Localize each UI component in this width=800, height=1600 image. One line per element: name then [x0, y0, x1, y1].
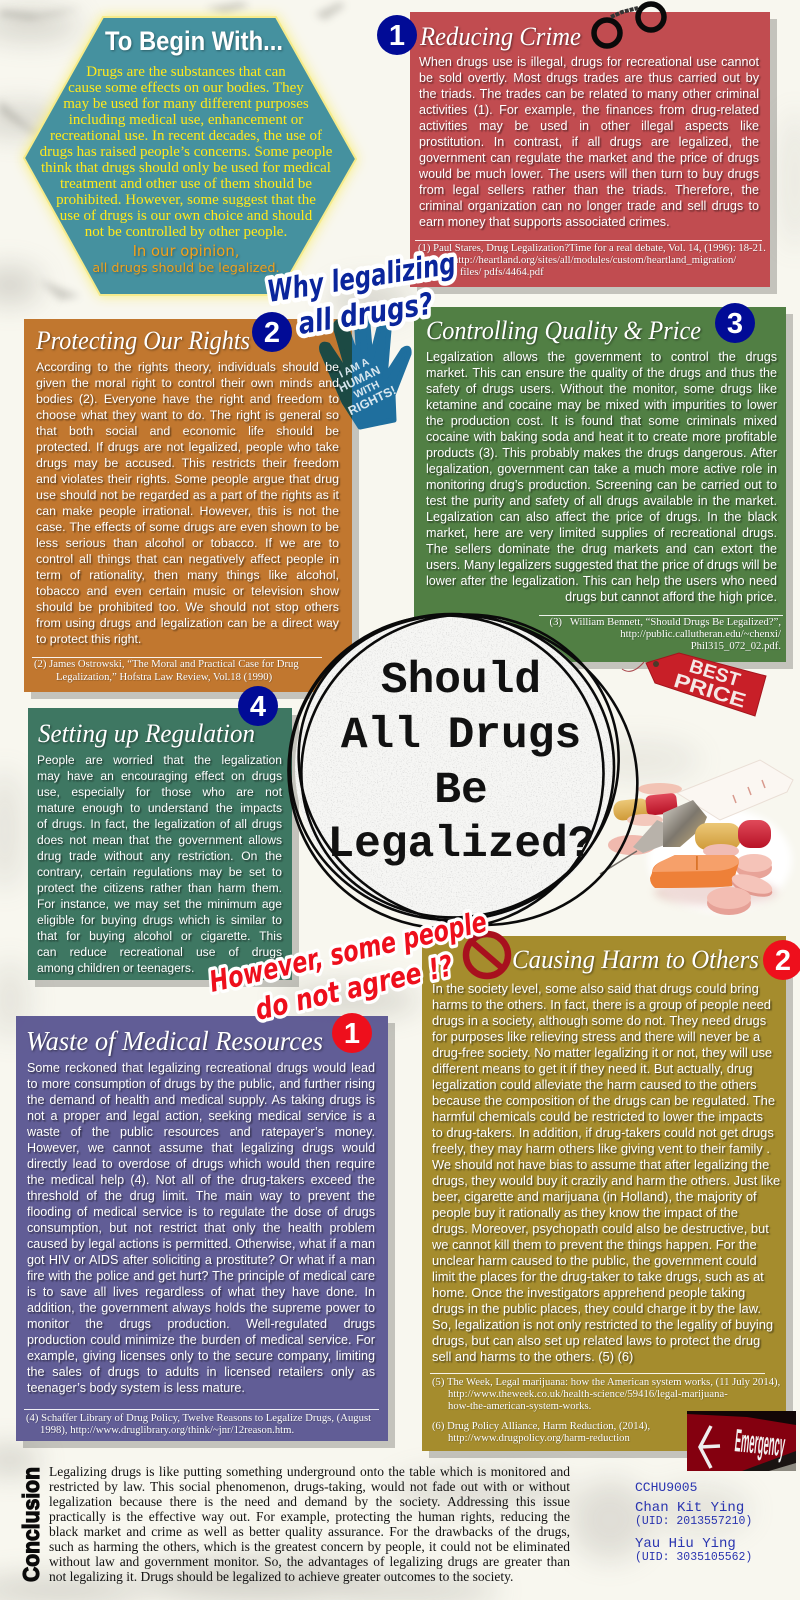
references 5 and 6: (6) Drug Policy Alliance, Harm Reduction, (2014),	[432, 1420, 650, 1432]
panel: waste of medical resources	[16, 1016, 388, 1441]
tag: best price	[622, 652, 767, 717]
body text: sell and harms to the others. (5) (6)	[432, 1349, 633, 1364]
body text: test the purity and safety of all drugs available in the market.	[426, 494, 777, 508]
title text	[327, 656, 595, 870]
body text: ketamine and cocaine may be mixed with impurities to lower	[426, 398, 777, 412]
body text: caused by legal actions is permitted. Otherwise, what if a man	[27, 1237, 375, 1251]
body text: the triads. The trades can be related to many other criminal	[419, 87, 759, 101]
body text: activities (1). For example, the finances from drug-related	[419, 103, 759, 117]
body text: protect the citizens rather than harm them.	[37, 881, 282, 895]
body text: freely, they may harm others like giving vent to their family .	[432, 1141, 770, 1156]
body text: example, giving licenses only to the secure company, limiting	[27, 1349, 375, 1363]
body text: drugs in the public places, they could charge it by the law.	[432, 1301, 761, 1316]
badge: blue 2: 2	[264, 317, 280, 349]
heading: reducing crime: Reducing Crime	[419, 22, 581, 51]
text: conclusion: not legalizing it. Drugs should be legalized to achieve greater outcomes to the society.	[49, 1569, 513, 1584]
panel: to begin with (hexagon)	[16, 8, 364, 304]
reference 3: (3) William Bennett, “Should Drugs Be Legalized?”,	[550, 616, 781, 628]
references 5 and 6: http://www.theweek.co.uk/health-science/59416/legal-marijuana-	[448, 1388, 728, 1400]
body text: to drug-takers. In addition, if drug-takers could not get drugs	[432, 1125, 774, 1140]
body text: limit the places for the drug-taker to take drugs, such as at	[432, 1269, 764, 1284]
intro text: cause some effects on our bodies. They	[68, 80, 304, 96]
reference 4: (4) Schaffer Library of Drug Policy, Twelve Reasons to Legalize Drugs, (August	[26, 1412, 371, 1424]
reference 1: files/ pdfs/4464.pdf	[460, 266, 544, 278]
reference 4: 1998), http://www.druglibrary.org/think/~jnr/12reason.htm.	[40, 1424, 294, 1436]
body text: the medical help (4). Not all of the drug-takers exceed the	[27, 1173, 375, 1187]
body text: drug-free society. No matter legalizing it or not, they will use	[432, 1045, 772, 1060]
body text: We should not have bias to assume that after legalizing the	[432, 1157, 769, 1172]
body text: earn money that supports associated crimes.	[419, 215, 670, 229]
icon: human rights hand	[319, 316, 412, 430]
text: conclusion: Legalizing drugs is like putting something underground onto the table which is monitored and	[49, 1464, 570, 1479]
icon: prohibition sign	[462, 930, 512, 980]
body text: threshold of the drug limit. The main way to prevent the	[27, 1189, 375, 1203]
body text: harmful chemicals could be restricted to lower the impacts	[432, 1109, 763, 1124]
body text	[432, 981, 782, 1366]
body text: the sales of drugs to adults in licensed retailers only as	[27, 1365, 375, 1379]
body text: flooding of medical service is to regulate the dose of drugs	[27, 1205, 375, 1219]
body text: cocaine with baking soda and heat it to create more profitable	[426, 430, 777, 444]
body text: protected. If drugs are not legalized, people who take	[36, 440, 339, 454]
hexagon shape	[16, 8, 364, 304]
icon: handcuffs	[591, 1, 667, 49]
body text: drugs may be accused. This restricts their freedom	[36, 456, 339, 470]
intro text: drugs has raised people’s concerns. Some people	[40, 144, 332, 160]
body text: that both social and economic life should be	[36, 424, 339, 438]
opinion statement: all drugs should be legalized.	[92, 261, 280, 276]
reference 3	[539, 615, 783, 652]
panel: controlling quality and price	[414, 307, 786, 662]
body text: addition, the government always holds the supreme power to	[27, 1301, 375, 1315]
opinion statement: In our opinion,	[133, 243, 239, 260]
intro text: Drugs are the substances that can	[86, 64, 286, 80]
heading: protecting our rights: Protecting Our Rights	[35, 326, 250, 355]
body text: can reduce recreational use of drugs	[37, 945, 282, 959]
body text: from legal sellers rather than the triads. Therefore, the	[419, 183, 759, 197]
body text	[36, 360, 771, 1024]
body text: consumption, but not restrict that only the health problem	[27, 1221, 375, 1235]
body text: bodies (2). Everyone have the right and freedom to	[36, 392, 339, 406]
text: conclusion: legalization because there is the need and demand by the society. Addressing this issue	[49, 1494, 570, 1509]
banner: however some people do not agree: However, some people	[206, 904, 490, 999]
intro text: may be used for many different purposes	[63, 96, 309, 112]
intro text: recreational use. In recent decades, the use of	[50, 128, 322, 144]
body text: be sold overtly. Most drugs trades are thus carried out by	[419, 71, 759, 85]
body text: However, we cannot assume that legalizing drugs would	[27, 1141, 375, 1155]
banner: why legalizing all drugs: all drugs?	[296, 287, 436, 342]
text: conclusion: black market and crime as well as better quality assurance. For the drawbacks of the drugs,	[49, 1524, 570, 1539]
body text: Legalization allows the government to control the drugs	[426, 350, 777, 364]
badge: blue 4: 4	[250, 691, 266, 723]
reference 2: (2) James Ostrowski, “The Moral and Practical Case for Drug	[34, 658, 299, 670]
body text: contrary, certain regulations may be set to	[37, 865, 282, 879]
reference 4	[24, 1409, 379, 1436]
references 5 and 6: how-the-american-system-works.	[448, 1400, 591, 1412]
banner: however some people do not agree	[206, 904, 490, 1027]
references 5 and 6	[430, 1373, 780, 1444]
body text: According to the rights theory, individuals should be	[36, 360, 339, 374]
body text: not a proper and legal action, seeking medical service is a	[27, 1109, 375, 1123]
panel: reducing crime	[410, 12, 770, 287]
badge: red 1: 1	[344, 1018, 360, 1050]
body text: less serious than alcohol or tobacco. If we are to	[36, 536, 339, 550]
reference 1: http://heartland.org/sites/all/modules/custom/heartland_migration/	[453, 254, 736, 266]
title text: Should	[381, 656, 541, 706]
icon: human rights hand: HUMAN	[336, 363, 383, 395]
body text: got HIV or AIDS after soliciting a prostitute? Or what if a man	[27, 1253, 375, 1267]
badge: red 2: 2	[775, 945, 791, 977]
heading: conclusion vertical: Conclusion	[18, 1467, 44, 1582]
body text: unclear harm caused to the public, the government could	[432, 1253, 757, 1268]
intro text: including medical use, enhancement or	[69, 112, 303, 128]
body text: legalization, government can take a much more active role in	[426, 462, 777, 476]
references 5 and 6: http://www.drugpolicy.org/harm-reduction	[448, 1432, 630, 1444]
reference 1: (1) Paul Stares, Drug Legalization?Time for a real debate, Vol. 14, (1996): 18-21.	[418, 242, 766, 254]
credits: (UID: 3035105562)	[635, 1551, 752, 1564]
body text: use should not be regarded as a part of the rights as it	[36, 488, 339, 502]
title text: All Drugs	[341, 711, 581, 761]
body text: monitor the drugs production. Well-regulated drugs	[27, 1317, 375, 1331]
intro text: prohibited. However, some suggest that the	[56, 192, 316, 208]
heading: setting up regulation: Setting up Regulation	[38, 719, 255, 748]
body text: from using drugs and legalization can be a direct way	[36, 616, 339, 630]
body text: For instance, we may set the minimum age	[37, 897, 282, 911]
badge: blue 1	[254, 15, 755, 324]
body text: would be much lower. The users will then turn to buy drugs	[419, 167, 759, 181]
body text: safety of drugs users. Without the monitor, some drugs like	[426, 382, 777, 396]
tag: best price: BEST	[687, 656, 743, 691]
references 5 and 6: (5) The Week, Legal marijuana: how the American system works, (11 July 2014),	[432, 1376, 780, 1388]
body text: users. Many legalizers suggested that the price of drugs will be	[426, 558, 777, 572]
body text: So, legalization is not only restricted to the legality of buying	[432, 1317, 773, 1332]
tag: best price: PRICE	[671, 670, 748, 713]
body text: drugs, they would buy it crazily and harm the others. Just like	[432, 1173, 780, 1188]
body text: directly lead to overdose of drugs which would then require	[27, 1157, 375, 1171]
body text: that for buying alcohol or cigarette. This	[37, 929, 282, 943]
body text: drugs. Moreover, psychopath could also be destructive, but	[432, 1221, 769, 1236]
title text: Be	[434, 766, 488, 816]
text: conclusion: without law and government monitor. So, the advantages of legalizing drugs are greater than	[49, 1554, 570, 1569]
body text: the demand of health and medical supply. As taking drugs is	[27, 1093, 375, 1107]
body text: harms to the others. In fact, there is a group of people need	[432, 997, 771, 1012]
body text: activities may be used in other illegal aspects like	[419, 119, 759, 133]
body text: eligible for buying drugs which is similar to	[37, 913, 282, 927]
badge: blue 1: 1	[389, 20, 405, 52]
badge: red 2	[763, 940, 800, 980]
credits: Chan Kit Ying	[635, 1500, 744, 1516]
opinion statement	[92, 243, 280, 276]
body text: of drugs. In fact, the legalization of all drugs	[37, 817, 282, 831]
body text: term of rationality, then many things like alcohol,	[36, 568, 339, 582]
banner: why legalizing all drugs	[264, 246, 458, 342]
body text	[419, 55, 761, 231]
badge: blue 2	[252, 312, 292, 352]
body text	[426, 350, 779, 606]
intro text: not be controlled by other people.	[85, 224, 287, 240]
body text: monitoring drug’s production. Screening can be carried out to	[426, 478, 777, 492]
body text: choose what they want to do. The right is general so	[36, 408, 339, 422]
text: conclusion: practically is the effective way out. For example, protecting the human rights, reducing the	[49, 1509, 570, 1524]
badge: blue 3: 3	[727, 308, 743, 340]
icon: human rights hand: WITH	[352, 379, 382, 401]
intro text	[40, 64, 332, 240]
body text: production could minimize the burden of medical service. For	[27, 1333, 375, 1347]
body text: legalization could alleviate the harm caused to the others	[432, 1077, 757, 1092]
body text: People are worried that the legalization	[37, 753, 282, 767]
heading: controlling quality and price: Controlling Quality & Price	[426, 316, 701, 345]
body text: should be prohibited too. We should not stop others	[36, 600, 339, 614]
illustration: pills and syringe	[600, 760, 794, 915]
photo: emergency sign	[687, 1411, 796, 1471]
reference 2	[32, 657, 322, 684]
body text: among children or teenagers.	[37, 961, 194, 975]
body text: government can regulate the market and the price of drugs	[419, 151, 759, 165]
body text: drugs in a society, although some do not. They need drugs	[432, 1013, 766, 1028]
body text: to more consumption of drugs by the public, and further rising	[27, 1077, 375, 1091]
center title circle	[287, 612, 639, 928]
badge: blue 3	[715, 303, 755, 343]
icon: human rights hand: RIGHTS!	[346, 383, 398, 418]
body text: criminal organization can no longer trade and sell drugs to	[419, 199, 759, 213]
body text: can make people irrational. However, this is not the	[36, 504, 339, 518]
credits	[635, 1480, 752, 1564]
reference 1	[415, 240, 766, 278]
heading: causing harm to others: Causing Harm to Others	[512, 945, 759, 974]
text: conclusion	[49, 1464, 570, 1584]
body text: drugs but cannot afford the high price.	[565, 590, 777, 604]
body text: to protect this right.	[36, 632, 141, 646]
banner: however some people do not agree: do not agree !?	[252, 948, 457, 1027]
reference 3: Phil315_072_02.pdf.	[691, 640, 781, 652]
body text: drugs, but can also set up related laws to protect the drug	[432, 1333, 760, 1348]
text: conclusion: such as harming the others, which is the greatest concern by people, it could not be eliminated	[49, 1539, 570, 1554]
body text: waste of the public resources and ratepayer’s money.	[27, 1125, 375, 1139]
credits: Yau Hiu Ying	[635, 1536, 736, 1552]
body text: control all things that can negatively affect people in	[36, 552, 339, 566]
reference 2: Legalization,” Hofstra Law Review, Vol.18 (1990)	[56, 671, 272, 683]
banner: why legalizing all drugs: Why legalizing	[265, 246, 458, 310]
body text: because the composition of the drugs can be regulated. The	[432, 1093, 775, 1108]
body text	[27, 1061, 377, 1397]
body text: tobacco and even certain music or television show	[36, 584, 339, 598]
body text: market. This can ensure the quality of the drugs and thus the	[426, 366, 777, 380]
body text: Legalization can also affect the price of drugs. In the black	[426, 510, 777, 524]
body text: When drugs use is illegal, drugs for recreational use cannot	[419, 55, 759, 69]
intro text: think that drugs should only be used for medical	[41, 160, 331, 176]
body text: prostitution. In contrast, if all drugs are legalized, the	[419, 135, 759, 149]
body text: fire with the police and get hurt? The principle of medical care	[27, 1269, 375, 1283]
body text: teenager’s body system is less mature.	[27, 1381, 245, 1395]
reference 3: http://public.callutheran.edu/~chenxi/	[620, 628, 781, 640]
text: conclusion: restricted by law. This social phenomenon, drugs-taking, would not fade out with or without	[49, 1479, 570, 1494]
body text: for purposes like relieving stress and there will never be a	[432, 1029, 760, 1044]
body text: drug trade without any restriction. On the	[37, 849, 282, 863]
body text: and violates their rights. Some people argue that drug	[36, 472, 339, 486]
body text: may have an encouraging effect on drugs	[37, 769, 282, 783]
body text: lower after the legalization. This can help the users who need	[426, 574, 777, 588]
panel: protecting our rights	[24, 319, 352, 692]
body text: we cannot kill them to prevent the things happen. For the	[432, 1237, 757, 1252]
body text: products (3). This probably makes the drugs dangerous. After	[426, 446, 777, 460]
intro text: treatment and other use of them should be	[60, 176, 312, 192]
body text: The sellers dominate the drug markets and can extort the	[426, 542, 777, 556]
body text: mature enough to understand the impacts	[37, 801, 282, 815]
body text: people buy it rationally as they know the impact of the	[432, 1205, 738, 1220]
body text: In the society level, some also said that drugs could bring	[432, 981, 759, 996]
body text: Some reckoned that legalizing recreational drugs would lead	[27, 1061, 375, 1075]
body text: is to save all lives regardless of what they have done. In	[27, 1285, 375, 1299]
body text: does not mean that the government allows	[37, 833, 282, 847]
panel: setting up regulation	[28, 708, 292, 980]
badge: blue 4	[238, 686, 278, 726]
body text: home. Once the investigators apprehend people taking	[432, 1285, 745, 1300]
body text: use, especially for those who are not	[37, 785, 282, 799]
panel: causing harm to others	[422, 936, 786, 1451]
icon: human rights hand: I AM A	[337, 356, 371, 381]
credits: CCHU9005	[635, 1480, 697, 1495]
body text	[37, 753, 284, 976]
body text: beer, cigarette and marijuana (in Holland), the majority of	[432, 1189, 757, 1204]
body text: different means to get it if they need it. But actually, drug	[432, 1061, 753, 1076]
badge: red 1	[332, 1013, 372, 1053]
heading: waste of medical resources: Waste of Medical Resources	[26, 1026, 323, 1056]
body text: given the moral right to control their own minds and	[36, 376, 339, 390]
heading: to begin with: To Begin With...	[105, 26, 283, 56]
body text: market, here are very limited supplies of recreational drugs.	[426, 526, 777, 540]
title text: Legalized?	[327, 820, 595, 870]
body text: case. The effects of some drugs are even shown to be	[36, 520, 339, 534]
credits: (UID: 2013557210)	[635, 1515, 752, 1528]
body text: the production cost. It is found that some criminals mixed	[426, 414, 777, 428]
intro text: use of drugs is our own choice and should	[60, 208, 312, 224]
